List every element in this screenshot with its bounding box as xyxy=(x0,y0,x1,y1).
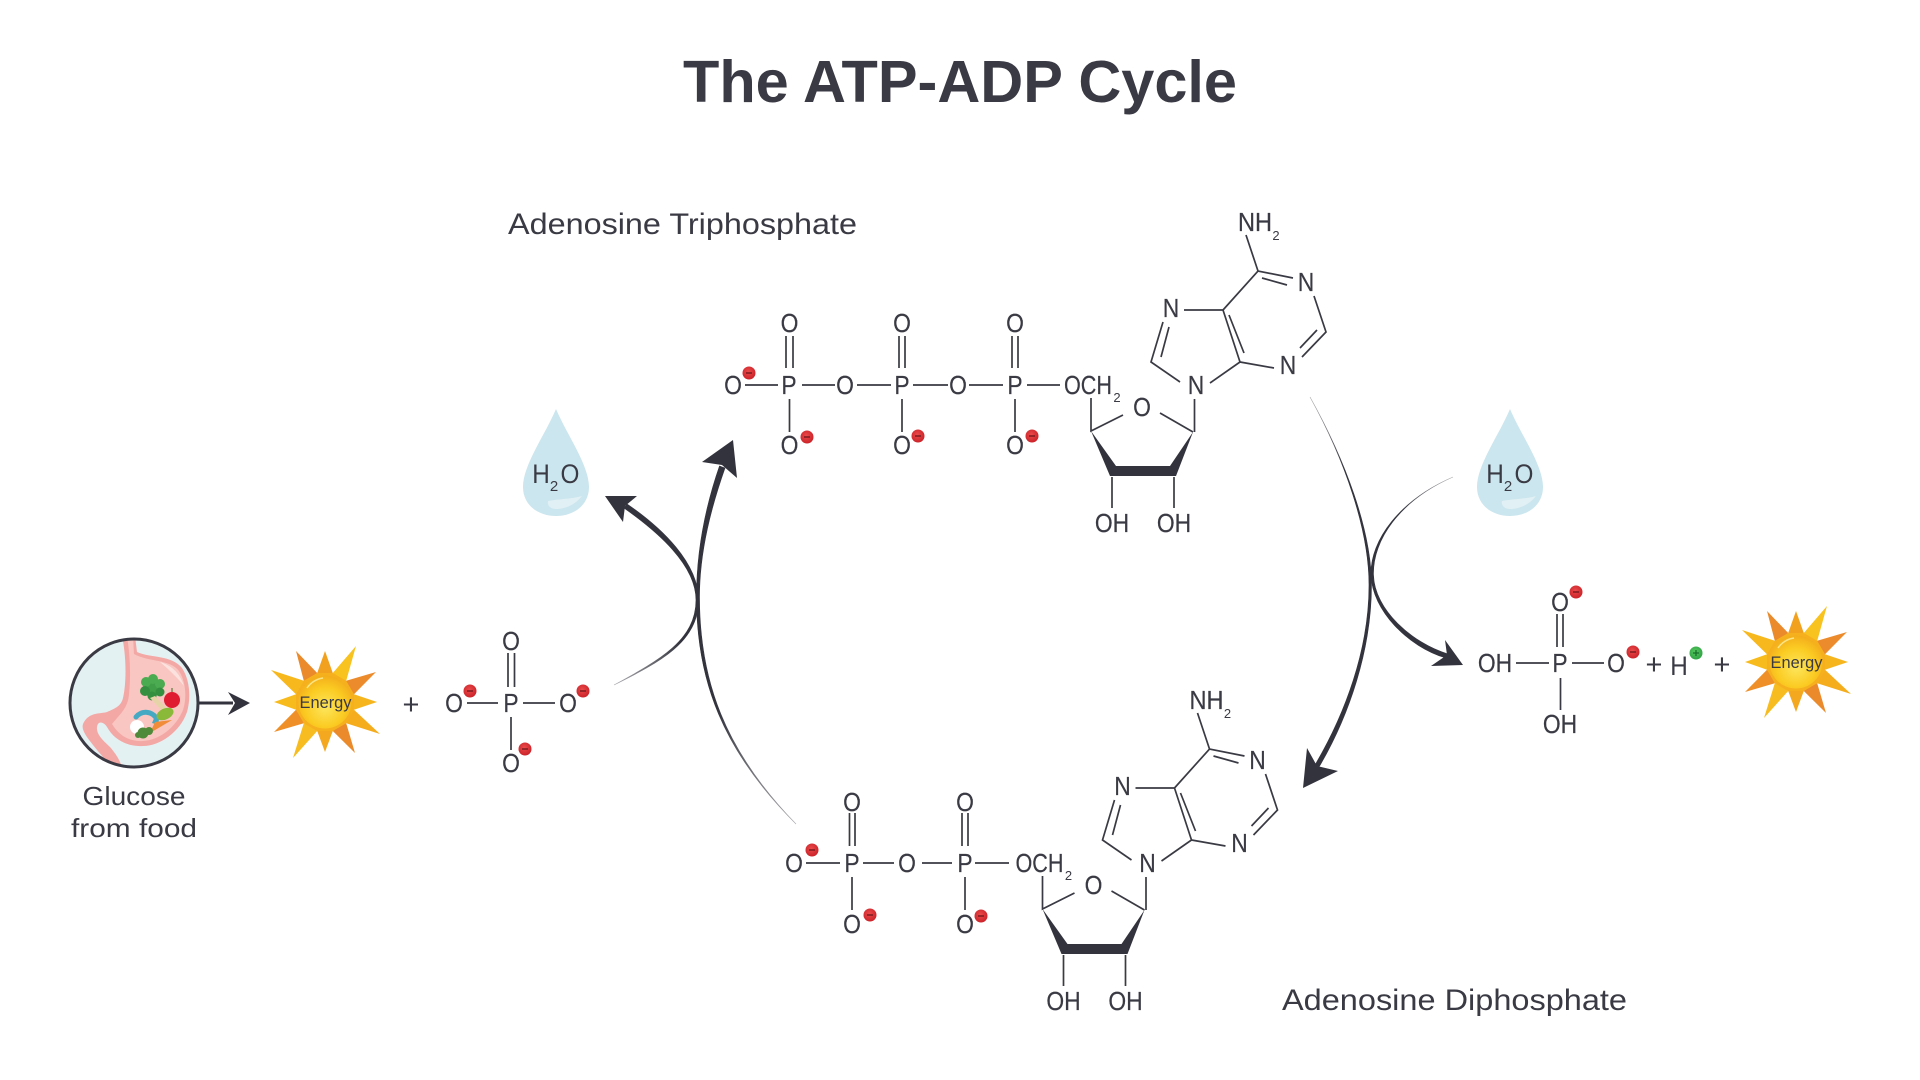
icon: energy sun right: Energy xyxy=(1770,654,1823,672)
molecule: phosphate left: O xyxy=(559,690,577,718)
molecule: ATP adenosine (ribose and adenine): N xyxy=(1188,372,1204,400)
icon: left water drop H2O: 2 xyxy=(550,478,558,495)
molecule: ADP diphosphate chain: O xyxy=(956,911,974,939)
molecule: ATP adenosine (ribose and adenine): OCH xyxy=(1064,370,1112,400)
molecule: ADP adenosine (ribose and adenine): N xyxy=(1231,830,1248,858)
molecule: ADP adenosine (ribose and adenine): 2 xyxy=(1065,868,1072,883)
molecule: ATP adenosine (ribose and adenine): N xyxy=(1163,295,1179,323)
icon: left water drop H2O xyxy=(523,409,589,516)
arrow: branch to left water drop xyxy=(605,496,698,685)
molecule: ADP adenosine (ribose and adenine): N xyxy=(1114,773,1131,801)
molecule: ATP triphosphate chain xyxy=(724,310,1060,460)
icon: right water drop H2O xyxy=(1477,409,1543,516)
molecule: ATP adenosine (ribose and adenine) xyxy=(1064,207,1326,538)
molecule: phosphate left: O xyxy=(445,690,463,718)
molecule: ADP adenosine (ribose and adenine): NH xyxy=(1190,685,1224,715)
molecule: phosphate right: O xyxy=(1551,589,1569,617)
arrow: stomach to energy xyxy=(199,692,250,715)
molecule: ADP adenosine (ribose and adenine): N xyxy=(1249,747,1266,775)
molecule: ADP adenosine (ribose and adenine): N xyxy=(1139,850,1156,878)
icon: energy sun left: Energy xyxy=(300,694,352,712)
text: plus H+ plus: H xyxy=(1670,652,1688,681)
arrow: cycle right, ATP to ADP xyxy=(1303,397,1372,788)
molecule: ATP triphosphate chain: O xyxy=(836,372,854,400)
molecule: ATP adenosine (ribose and adenine): OH xyxy=(1095,510,1129,538)
molecule: ADP diphosphate chain xyxy=(785,789,1009,939)
molecule: ADP diphosphate chain: P xyxy=(844,850,860,878)
text: plus H+ plus xyxy=(1646,646,1730,681)
molecule: ADP diphosphate chain: O xyxy=(898,850,916,878)
molecule: ATP adenosine (ribose and adenine): N xyxy=(1298,269,1314,297)
molecule: ATP adenosine (ribose and adenine): 2 xyxy=(1113,390,1121,405)
molecule: ADP adenosine (ribose and adenine): 2 xyxy=(1224,706,1231,721)
molecule: ATP triphosphate chain: O xyxy=(781,310,798,338)
title: The ATP-ADP Cycle xyxy=(683,49,1237,115)
molecule: phosphate left: O xyxy=(502,628,520,656)
molecule: ATP adenosine (ribose and adenine): OH xyxy=(1157,510,1191,538)
text: plus H+ plus: + xyxy=(1714,649,1730,681)
heading: Adenosine Triphosphate: Adenosine Triphosphate xyxy=(508,208,857,241)
icon: right water drop H2O: 2 xyxy=(1504,478,1512,495)
molecule: ATP triphosphate chain: O xyxy=(949,372,967,400)
molecule: ATP triphosphate chain: O xyxy=(1006,310,1024,338)
heading: Adenosine Diphosphate: Adenosine Diphosphate xyxy=(1282,984,1627,1017)
molecule: ADP diphosphate chain: O xyxy=(843,911,861,939)
icon: right water drop H2O: H xyxy=(1486,460,1504,489)
label: glucose from food: Glucose xyxy=(82,781,186,811)
icon: left water drop H2O: O xyxy=(561,460,579,489)
molecule: ATP adenosine (ribose and adenine): N xyxy=(1280,352,1296,380)
plus sign left: + xyxy=(403,689,419,721)
molecule: ATP triphosphate chain: O xyxy=(1006,432,1024,460)
molecule: ADP diphosphate chain: O xyxy=(956,789,974,817)
label: glucose from food: from food xyxy=(71,813,197,843)
molecule: ADP adenosine (ribose and adenine): OH xyxy=(1046,988,1081,1016)
molecule: ATP triphosphate chain: O xyxy=(893,432,911,460)
text: plus H+ plus: + xyxy=(1646,649,1662,681)
molecule: phosphate left: O xyxy=(502,750,520,778)
molecule: phosphate right: OH xyxy=(1478,650,1512,678)
molecule: ADP adenosine (ribose and adenine): OCH xyxy=(1016,848,1064,878)
icon: energy sun right xyxy=(1742,606,1851,718)
molecule: ATP triphosphate chain: O xyxy=(724,372,742,400)
molecule: phosphate right: O xyxy=(1607,650,1625,678)
molecule: ATP triphosphate chain: P xyxy=(781,372,797,400)
molecule: ADP diphosphate chain: O xyxy=(785,850,803,878)
molecule: ATP adenosine (ribose and adenine): 2 xyxy=(1272,228,1280,243)
molecule: ATP adenosine (ribose and adenine): O xyxy=(1133,394,1151,422)
molecule: ATP triphosphate chain: P xyxy=(894,372,910,400)
icon: left water drop H2O: H xyxy=(532,460,550,489)
icon: right water drop H2O: O xyxy=(1515,460,1533,489)
molecule: phosphate right: P xyxy=(1552,650,1568,678)
molecule: ADP adenosine (ribose and adenine) xyxy=(1016,685,1278,1016)
molecule: ATP adenosine (ribose and adenine): NH xyxy=(1238,207,1272,237)
arrow: cycle left, ADP to ATP xyxy=(696,440,796,824)
molecule: phosphate left xyxy=(445,628,590,778)
icon: stomach with food xyxy=(70,636,198,770)
molecule: ADP adenosine (ribose and adenine): OH xyxy=(1108,988,1143,1016)
molecule: ADP adenosine (ribose and adenine): O xyxy=(1085,872,1102,900)
icon: energy sun left xyxy=(271,646,380,758)
molecule: phosphate right: OH xyxy=(1543,711,1577,739)
molecule: phosphate right xyxy=(1478,586,1640,739)
molecule: phosphate left: P xyxy=(503,690,519,718)
label: glucose from food xyxy=(71,781,197,843)
molecule: ADP diphosphate chain: O xyxy=(843,789,861,817)
molecule: ATP triphosphate chain: O xyxy=(781,432,798,460)
molecule: ATP triphosphate chain: O xyxy=(893,310,911,338)
molecule: ADP diphosphate chain: P xyxy=(957,850,973,878)
arrow: branch from right water drop to phosphate xyxy=(1371,477,1463,666)
molecule: ATP triphosphate chain: P xyxy=(1007,372,1023,400)
